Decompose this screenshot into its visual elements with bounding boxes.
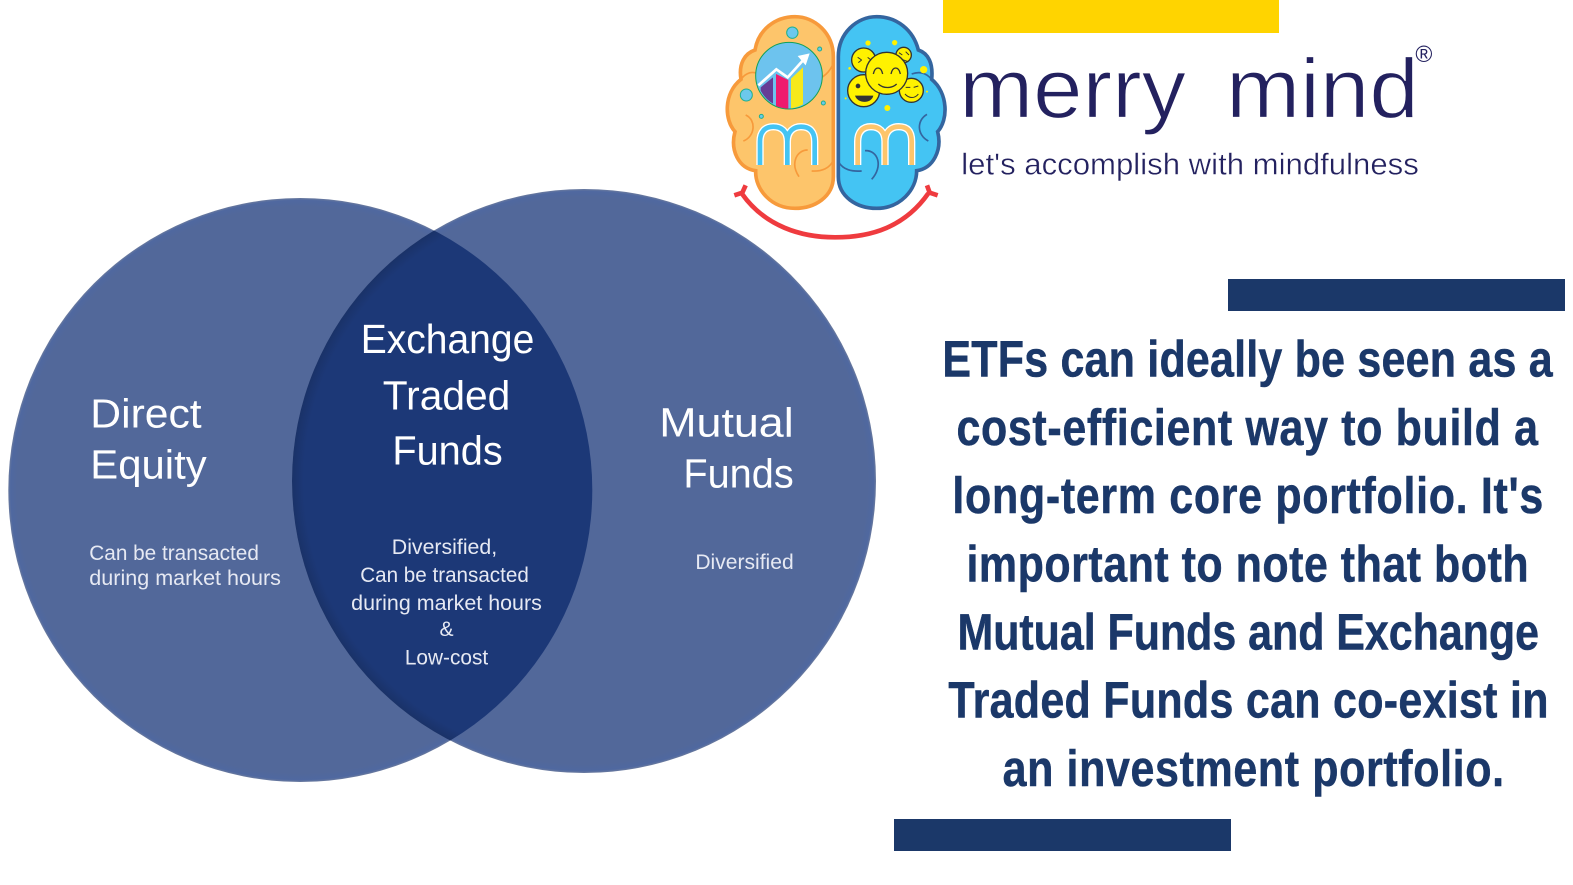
paragraph: etf summary: long-term core portfolio. It's — [952, 468, 1543, 525]
text: direct equity description: during market hours — [89, 567, 281, 590]
logo wordmark: merry mind — [959, 41, 1432, 135]
left brain — [727, 17, 833, 208]
logo wordmark: merry mind: mind — [1226, 41, 1419, 135]
label: mutual funds: Funds — [683, 451, 794, 497]
text: mutual funds description: Diversified — [695, 551, 794, 574]
text: etf description: Low-cost — [405, 646, 488, 669]
text: direct equity description — [89, 542, 281, 590]
label: exchange traded funds: Exchange — [361, 316, 534, 362]
logo tagline: let's accomplish with mindfulness — [961, 149, 1419, 182]
overlap: exchange traded funds — [292, 230, 592, 740]
text: etf description: & — [439, 618, 454, 641]
label: exchange traded funds: Funds — [392, 428, 503, 474]
text: etf description: Diversified, — [392, 536, 497, 559]
logo wordmark: merry mind: ® — [1415, 41, 1432, 67]
paragraph: etf summary — [942, 331, 1553, 798]
label: exchange traded funds — [361, 316, 534, 474]
text: etf description — [351, 536, 542, 669]
paragraph: etf summary: an investment portfolio. — [1003, 740, 1504, 798]
circle: direct equity — [8, 198, 592, 782]
letter m, left — [760, 127, 815, 165]
yellow bar — [943, 0, 1279, 33]
label: direct equity: Direct — [90, 390, 202, 436]
paragraph: etf summary: Mutual Funds and Exchange — [957, 604, 1539, 661]
right brain — [838, 17, 945, 208]
text: etf description: during market hours — [351, 592, 542, 615]
paragraph: etf summary: Traded Funds can co-exist in — [948, 672, 1549, 730]
paragraph: etf summary: cost-efficient way to build a — [956, 399, 1539, 457]
circle: mutual funds — [292, 189, 876, 773]
smile — [734, 185, 938, 237]
navy bar bottom — [894, 819, 1231, 851]
venn diagram — [8, 189, 876, 782]
text: etf description: Can be transacted — [360, 564, 529, 587]
label: exchange traded funds: Traded — [383, 372, 510, 418]
label: mutual funds: Mutual — [659, 399, 794, 445]
logo wordmark: merry mind: merry — [959, 41, 1186, 135]
icon: merry mind brain logo — [727, 17, 945, 237]
label: mutual funds — [659, 399, 794, 497]
paragraph: etf summary: ETFs can ideally be seen as a — [942, 331, 1553, 388]
paragraph: etf summary: important to note that both — [966, 536, 1529, 593]
text: direct equity description: Can be transacted — [89, 542, 259, 565]
label: direct equity — [90, 390, 207, 488]
letter m, right — [858, 127, 912, 165]
navy bar top — [1228, 279, 1565, 311]
label: direct equity: Equity — [90, 442, 207, 488]
